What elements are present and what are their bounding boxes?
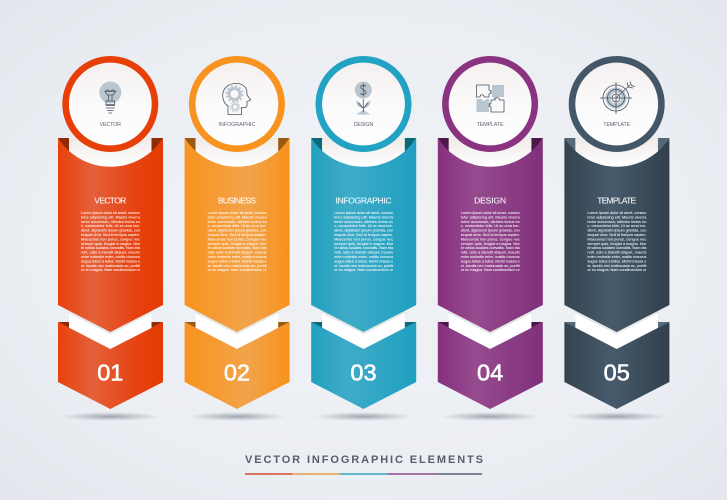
heading: INFOGRAPHIC — [336, 196, 392, 206]
white ribbon — [322, 138, 405, 349]
body text: ndit, odio a blandit aliquet, mauris — [81, 251, 140, 255]
body text: c, consectetur felis. Ut ac urna bor- — [81, 224, 141, 228]
number: 04 — [477, 360, 503, 386]
corner folds — [564, 138, 669, 328]
icon: light bulb — [99, 82, 121, 113]
body text — [461, 211, 521, 272]
circle badge — [192, 59, 282, 149]
body text: sequat urna. Sed id tempus sapien. — [461, 233, 520, 237]
body text: enim molestie enim, mattis rhoncus — [208, 255, 267, 259]
upper arrow panel — [58, 138, 163, 332]
body text: or eu magna. Nam condimentum ur — [587, 268, 647, 272]
circle badge — [66, 59, 155, 149]
body text: semper quis, feugiat a magna. Mor — [587, 242, 647, 246]
body text: dient, dignissim ipsum gravida, con — [208, 229, 267, 233]
body text: Maecenas non purus, congue nec — [587, 237, 646, 241]
body text: enim molestie enim, mattis rhoncus — [461, 255, 520, 259]
number: 01 — [97, 360, 123, 386]
body text: sequat urna. Sed id tempus sapien. — [587, 233, 646, 237]
body text — [334, 211, 394, 272]
body text: Lorem ipsum dolor sit amet, consec — [208, 211, 267, 215]
body text: tortor accumsan, ultricies lectus eu — [587, 220, 646, 224]
circle label: TEMPLATE — [603, 122, 631, 128]
body text: ndit, odio a blandit aliquet, mauris — [461, 251, 520, 255]
lower arrow panel — [58, 322, 163, 409]
body text: sequat urna. Sed id tempus sapien. — [208, 233, 267, 237]
body text: Lorem ipsum dolor sit amet, consec — [334, 211, 393, 215]
corner folds — [185, 138, 290, 328]
column 4: design — [438, 59, 543, 421]
body text: c, consectetur felis. Ut ac urna bor- — [208, 224, 267, 228]
body text: semper quis, feugiat a magna. Mor — [208, 242, 267, 246]
circle label: INFOGRAPHIC — [218, 122, 255, 128]
lower arrow panel — [311, 322, 416, 409]
body text: enim molestie enim, mattis rhoncus — [81, 255, 140, 259]
heading: VECTOR — [94, 196, 126, 206]
body text: st, iaculis nec malesuada ac, porttit — [208, 264, 268, 268]
white ribbon — [575, 138, 658, 349]
body text: or eu magna. Nam condimentum ur — [461, 268, 521, 272]
body text: c, consectetur felis. Ut ac urna bor- — [461, 224, 521, 228]
body text: bi varius sodales convallis. Nam bla — [334, 246, 394, 250]
circle label: VECTOR — [100, 122, 121, 128]
body text: ndit, odio a blandit aliquet, mauris — [587, 251, 646, 255]
floor shadow — [60, 412, 160, 421]
body text: st, iaculis nec malesuada ac, porttit — [461, 264, 521, 268]
body text: st, iaculis nec malesuada ac, porttit — [81, 264, 141, 268]
body text: tortor accumsan, ultricies lectus eu — [81, 220, 140, 224]
body text: Maecenas non purus, congue nec — [208, 237, 267, 241]
body text: ndit, odio a blandit aliquet, mauris — [208, 251, 267, 255]
body text: Maecenas non purus, congue nec — [461, 237, 520, 241]
column 5: template — [564, 59, 669, 421]
body text: dient, dignissim ipsum gravida, con — [81, 229, 140, 233]
icon: head with gears — [223, 83, 251, 114]
body text: dient, dignissim ipsum gravida, con — [587, 229, 646, 233]
number: 05 — [604, 360, 630, 386]
body text: augue tellus a tellus. Morbi massa e — [587, 259, 646, 263]
floor shadow — [314, 412, 414, 421]
floor shadow — [440, 412, 540, 421]
body text: Lorem ipsum dolor sit amet, consec — [461, 211, 520, 215]
body text: semper quis, feugiat a magna. Mor — [334, 242, 394, 246]
body text: tetur adipiscing elit. Mauris viverra — [587, 215, 647, 219]
upper arrow panel — [311, 138, 416, 332]
body text: c, consectetur felis. Ut ac urna bor- — [334, 224, 394, 228]
corner folds — [58, 138, 163, 328]
body text — [81, 211, 141, 272]
body text: or eu magna. Nam condimentum ur — [208, 268, 267, 272]
body text — [587, 211, 647, 272]
white ribbon — [196, 138, 278, 349]
column 3: infographic — [311, 59, 416, 421]
body text: tortor accumsan, ultricies lectus eu — [208, 220, 267, 224]
body text: Maecenas non purus, congue nec — [334, 237, 393, 241]
white ribbon — [69, 138, 152, 349]
body text: sequat urna. Sed id tempus sapien. — [81, 233, 140, 237]
body text: enim molestie enim, mattis rhoncus — [587, 255, 646, 259]
circle badge — [445, 59, 535, 149]
column 2: business — [185, 59, 290, 421]
body text: augue tellus a tellus. Morbi massa e — [461, 259, 520, 263]
body text: semper quis, feugiat a magna. Mor — [81, 242, 141, 246]
corner folds — [438, 138, 543, 328]
body text: tortor accumsan, ultricies lectus eu — [461, 220, 520, 224]
body text: Lorem ipsum dolor sit amet, consec — [587, 211, 646, 215]
body text: dient, dignissim ipsum gravida, con — [334, 229, 393, 233]
body text: tetur adipiscing elit. Mauris viverra — [461, 215, 521, 219]
number: 02 — [224, 360, 250, 386]
body text: Maecenas non purus, congue nec — [81, 237, 140, 241]
body text: or eu magna. Nam condimentum ur — [81, 268, 141, 272]
body text: c, consectetur felis. Ut ac urna bor- — [587, 224, 647, 228]
floor shadow — [187, 412, 287, 421]
circle badge — [572, 59, 661, 149]
body text: or eu magna. Nam condimentum ur — [334, 268, 394, 272]
title: VECTOR INFOGRAPHIC ELEMENTS — [245, 454, 483, 466]
heading: BUSINESS — [218, 196, 256, 206]
body text: augue tellus a tellus. Morbi massa e — [208, 259, 267, 263]
circle label: TEMPLATE — [477, 122, 504, 128]
lower arrow panel — [438, 322, 543, 409]
heading: TEMPLATE — [597, 196, 637, 206]
body text: sequat urna. Sed id tempus sapien. — [334, 233, 393, 237]
icon: puzzle — [476, 85, 504, 112]
body text: tortor accumsan, ultricies lectus eu — [334, 220, 393, 224]
upper arrow panel — [185, 138, 290, 332]
body text: Lorem ipsum dolor sit amet, consec — [81, 211, 140, 215]
body text: dient, dignissim ipsum gravida, con — [461, 229, 520, 233]
circle badge — [319, 59, 408, 149]
number: 03 — [350, 360, 377, 386]
white ribbon — [449, 138, 531, 349]
body text: augue tellus a tellus. Morbi massa e — [81, 259, 140, 263]
body text: ndit, odio a blandit aliquet, mauris — [334, 251, 393, 255]
body text: tetur adipiscing elit. Mauris viverra — [334, 215, 394, 219]
body text: st, iaculis nec malesuada ac, porttit — [334, 264, 394, 268]
corner folds — [311, 138, 416, 328]
body text: enim molestie enim, mattis rhoncus — [334, 255, 393, 259]
upper arrow panel — [564, 138, 669, 332]
icon: money plant — [355, 82, 372, 114]
body text: tetur adipiscing elit. Mauris viverra — [208, 215, 267, 219]
icon: target — [600, 82, 635, 114]
lower arrow panel — [564, 322, 669, 409]
circle label: DESIGN — [354, 122, 373, 128]
heading: DESIGN — [474, 196, 506, 206]
body text — [208, 211, 268, 272]
title rainbow underline — [245, 473, 482, 475]
body text: augue tellus a tellus. Morbi massa e — [334, 259, 393, 263]
body text: bi varius sodales convallis. Nam bla — [461, 246, 521, 250]
body text: semper quis, feugiat a magna. Mor — [461, 242, 521, 246]
body text: bi varius sodales convallis. Nam bla — [81, 246, 141, 250]
lower arrow panel — [185, 322, 290, 409]
body text: bi varius sodales convallis. Nam bla — [587, 246, 647, 250]
upper arrow panel — [438, 138, 543, 332]
body text: st, iaculis nec malesuada ac, porttit — [587, 264, 647, 268]
body text: bi varius sodales convallis. Nam bla — [208, 246, 267, 250]
body text: tetur adipiscing elit. Mauris viverra — [81, 215, 141, 219]
floor shadow — [567, 412, 667, 421]
column 1: vector — [58, 59, 163, 421]
